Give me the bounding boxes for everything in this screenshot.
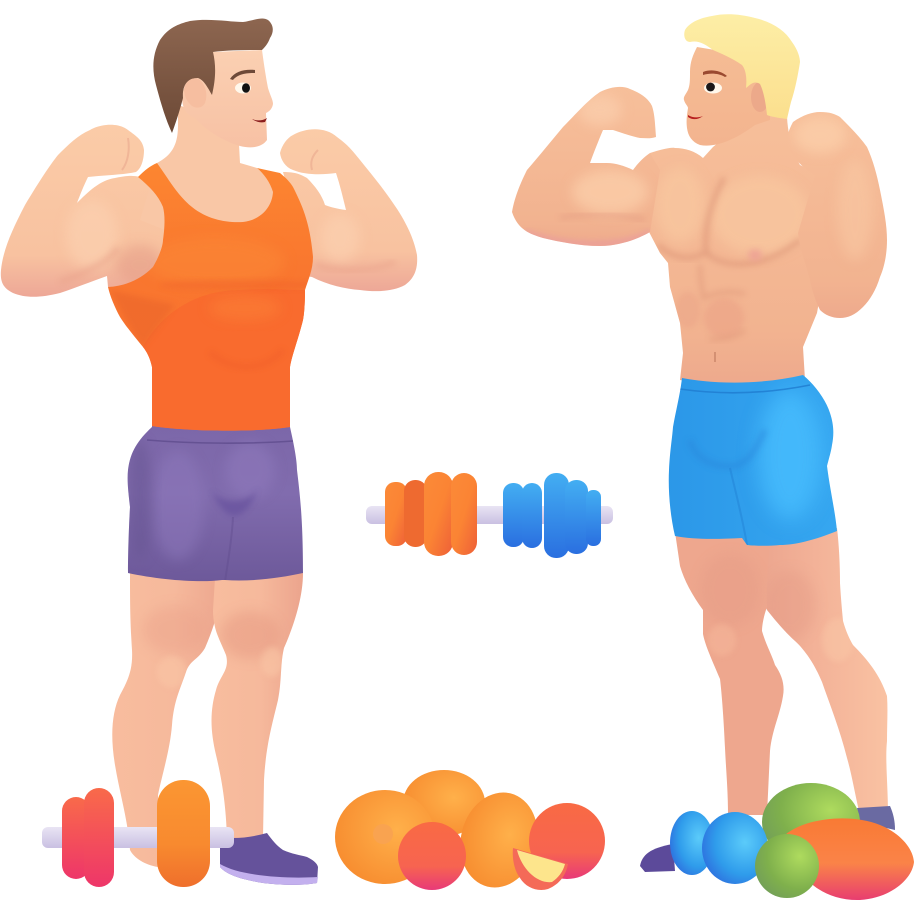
- fruit: top orange: [403, 770, 485, 836]
- fruit: large left orange: [335, 790, 435, 884]
- right man: head: [684, 14, 800, 146]
- left man: shoe: [220, 833, 318, 885]
- right man: left shoe: [640, 844, 675, 872]
- right man: right arm flexing: [788, 112, 887, 318]
- right man: right shoe: [857, 806, 895, 830]
- right man: far leg: [766, 528, 888, 808]
- fruit pile centre: [335, 770, 605, 896]
- left man: shorts: [128, 426, 303, 582]
- left man: hair: [153, 18, 273, 133]
- left man: eye: [230, 70, 255, 94]
- right man: hair: [684, 14, 800, 119]
- fruit: middle orange: [451, 784, 547, 896]
- center dumbbell: [366, 472, 613, 558]
- left man: right arm flexing: [280, 129, 418, 292]
- right man: left arm flexing: [512, 86, 658, 246]
- right man: [505, 14, 895, 872]
- fruit: red orange right: [529, 803, 605, 879]
- right man: abs: [676, 265, 745, 362]
- fruit: large blue ball: [702, 812, 768, 884]
- left man: head: [153, 18, 273, 147]
- fruit: mango: [785, 818, 914, 900]
- left man: [0, 18, 420, 885]
- fruit: small blue ball: [670, 811, 714, 875]
- right man: ear: [751, 82, 769, 112]
- left man: ear: [184, 78, 206, 108]
- right man: chest muscles: [657, 176, 804, 268]
- left man: tank top: [108, 163, 313, 431]
- left man: neck and chest skin: [140, 105, 280, 240]
- left man: near leg: [212, 573, 303, 838]
- right man: torso: [649, 116, 818, 383]
- left man: mouth: [252, 118, 267, 122]
- fruit: green melon: [762, 783, 860, 861]
- fruit: small green ball: [755, 834, 819, 898]
- fruit: pink plum: [398, 822, 466, 890]
- left man: far leg: [112, 574, 215, 867]
- right man: mouth: [688, 115, 703, 119]
- left man: left arm flexing: [0, 124, 164, 297]
- fruit pile right: [670, 783, 914, 900]
- right man: face: [684, 47, 770, 146]
- right man: eye: [703, 70, 727, 94]
- fruit: lemon wedge: [513, 848, 568, 890]
- right man: shorts: [665, 370, 840, 550]
- left man: face: [182, 50, 273, 147]
- bottom left dumbbell: [42, 780, 234, 887]
- right man: near leg: [676, 536, 784, 815]
